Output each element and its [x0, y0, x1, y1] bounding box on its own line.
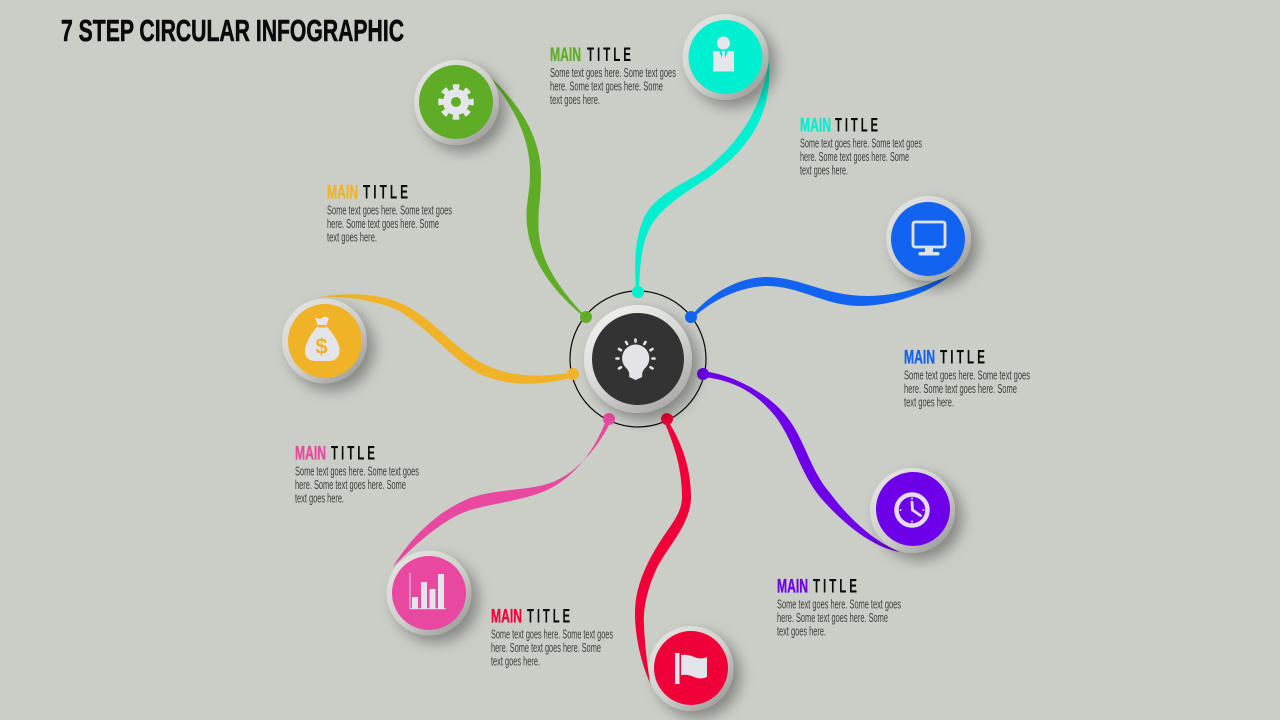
text block: pink: TITLE: [331, 442, 378, 464]
ribbon: green: [485, 72, 586, 317]
text block: pink: MAIN: [295, 442, 326, 464]
text block: green: MAIN: [550, 44, 581, 66]
text block: red: text goes here.: [491, 654, 540, 668]
text block: pink: here. Some text goes here. Some: [295, 478, 406, 492]
ribbon: blue: [693, 273, 953, 318]
text block: red: here. Some text goes here. Some: [491, 641, 601, 655]
text block: red: Some text goes here. Some text goes: [491, 628, 613, 642]
text block: cyan: text goes here.: [800, 164, 848, 178]
text block: pink: Some text goes here. Some text goes: [295, 464, 419, 478]
icon: flag: [675, 653, 707, 684]
text block: pink: [295, 442, 419, 506]
text block: yellow: Some text goes here. Some text goes: [327, 204, 452, 218]
text block: purple: here. Some text goes here. Some: [777, 611, 888, 625]
text block: blue: text goes here.: [904, 396, 954, 410]
icon: gear: [441, 87, 471, 117]
icon: light bulb: [616, 340, 654, 380]
text block: purple: [777, 576, 901, 638]
text block: green: TITLE: [587, 44, 634, 66]
title: 7 STEP CIRCULAR INFOGRAPHIC: [61, 14, 404, 48]
text block: purple: TITLE: [813, 576, 860, 598]
text block: cyan: [800, 114, 922, 178]
text block: red: [491, 606, 613, 668]
text block: purple: Some text goes here. Some text goes: [777, 598, 901, 612]
text block: purple: text goes here.: [777, 624, 826, 638]
ribbon: yellow: [320, 294, 573, 384]
icon: bar chart: [410, 573, 446, 609]
step: flag: [648, 626, 734, 711]
step: money bag: [282, 298, 367, 384]
text block: blue: TITLE: [940, 346, 988, 368]
ribbon: purple: [703, 371, 900, 552]
icon: money bag: $: [315, 334, 328, 359]
text block: green: Some text goes here. Some text goes: [550, 66, 676, 80]
icon: monitor: [913, 222, 945, 256]
ribbon: red: [635, 419, 691, 683]
text block: yellow: MAIN: [327, 182, 358, 204]
step: clock: [870, 468, 955, 553]
text block: green: here. Some text goes here. Some: [550, 80, 663, 94]
text block: cyan: MAIN: [800, 114, 831, 136]
text block: yellow: text goes here.: [327, 230, 377, 244]
text block: blue: [904, 346, 1030, 410]
text block: green: text goes here.: [550, 93, 600, 107]
icon: businessperson: [713, 36, 734, 72]
text block: yellow: [327, 182, 452, 244]
text block: blue: MAIN: [904, 346, 935, 368]
text block: cyan: here. Some text goes here. Some: [800, 150, 909, 164]
step: person: [682, 14, 768, 100]
center hub: [584, 305, 692, 413]
ribbon: pink: [393, 419, 612, 567]
text block: red: TITLE: [527, 606, 573, 628]
step: gear: [414, 60, 499, 145]
step: monitor: [886, 196, 971, 281]
icon: clock: [896, 494, 928, 526]
text block: cyan: TITLE: [835, 114, 881, 136]
connector ring: [570, 291, 706, 427]
node dots: [567, 286, 709, 425]
text block: yellow: here. Some text goes here. Some: [327, 217, 439, 231]
text block: pink: text goes here.: [295, 492, 344, 506]
text block: yellow: TITLE: [363, 182, 411, 204]
text block: red: MAIN: [491, 606, 522, 628]
text block: blue: here. Some text goes here. Some: [904, 382, 1017, 396]
text block: green: [550, 44, 676, 107]
step: chart: [386, 550, 472, 636]
text block: cyan: Some text goes here. Some text goes: [800, 136, 922, 150]
text block: purple: MAIN: [777, 576, 808, 598]
ribbon: cyan: [635, 60, 769, 290]
text block: blue: Some text goes here. Some text goes: [904, 368, 1030, 382]
